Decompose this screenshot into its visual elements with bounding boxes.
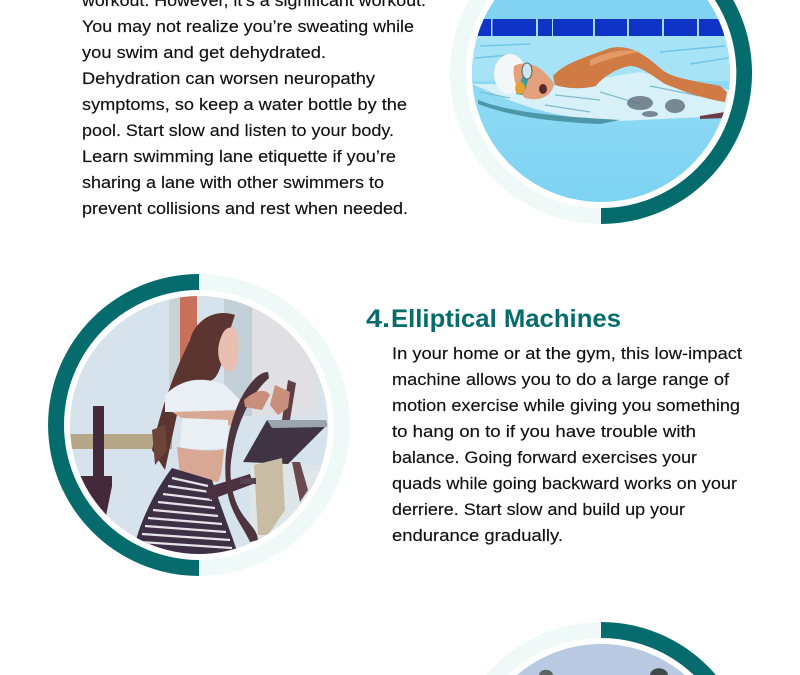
- text block: elliptical machines description: to hang on to if you have trouble with: [392, 423, 696, 441]
- text block: elliptical machines description: In your home or at the gym, this low-impact: [392, 345, 742, 363]
- text block: swimming tips: symptoms, so keep a water bottle by the: [82, 96, 407, 114]
- text block: elliptical machines description: derriere. Start slow and build up your: [392, 501, 686, 519]
- text block: swimming tips: [81, 0, 426, 218]
- text block: swimming tips: Dehydration can worsen neuropathy: [82, 70, 376, 88]
- text block: swimming tips: sharing a lane with other swimmers to: [82, 174, 384, 192]
- text block: elliptical machines description: balance. Going forward exercises your: [392, 449, 698, 467]
- text block: elliptical machines description: motion exercise while giving you something: [392, 397, 740, 415]
- text block: elliptical machines description: [392, 345, 742, 545]
- heading: elliptical machines: Elliptical Machines: [391, 305, 621, 333]
- heading: elliptical machines: 4.: [366, 305, 390, 333]
- text block: swimming tips: Learn swimming lane etiquette if you’re: [82, 148, 396, 166]
- text block: elliptical machines description: machine allows you to do a large range of: [392, 371, 729, 389]
- text block: elliptical machines description: endurance gradually.: [392, 527, 563, 545]
- photo: woman on elliptical machine: [70, 296, 328, 560]
- text block: swimming tips: pool. Start slow and listen to your body.: [82, 122, 394, 140]
- ring: elliptical photo frame: [48, 274, 350, 576]
- text block: swimming tips: You may not realize you’re sweating while: [82, 18, 414, 36]
- text block: swimming tips: you swim and get dehydrated.: [82, 44, 326, 62]
- photo: swimmer in pool: [472, 0, 730, 202]
- photo: sky with palm trees: [517, 644, 685, 675]
- ring: swimming photo frame: [450, 0, 752, 224]
- text block: swimming tips: prevent collisions and rest when needed.: [82, 200, 408, 218]
- ring: next photo frame: [486, 622, 716, 675]
- text block: elliptical machines description: quads while going backward works on your: [392, 475, 738, 493]
